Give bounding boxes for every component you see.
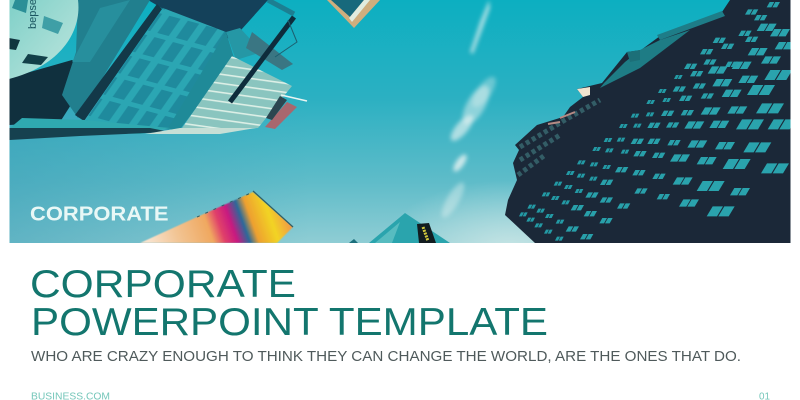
hero photo <box>10 0 790 243</box>
base strip <box>10 118 170 134</box>
antenna <box>281 95 307 101</box>
title: CORPORATE <box>30 263 296 306</box>
building: round tower <box>9 0 78 79</box>
dark top <box>148 0 268 40</box>
ornate edge <box>518 100 600 175</box>
rod <box>230 17 294 102</box>
roof <box>657 11 725 40</box>
building: left tower <box>9 0 307 140</box>
sign <box>265 102 297 129</box>
building: top centre fragment <box>327 0 380 28</box>
title <box>30 263 548 344</box>
building: right skyscraper <box>505 0 796 243</box>
windows <box>519 2 796 241</box>
tower light face <box>182 56 292 128</box>
tower left glass <box>62 0 150 118</box>
tower dark base <box>10 60 73 125</box>
tower grid face <box>84 8 226 130</box>
teal upper side <box>226 28 256 59</box>
tower right side <box>168 32 234 132</box>
billboard <box>140 191 293 243</box>
clouds <box>438 0 500 220</box>
building: bottom centre <box>349 213 450 243</box>
sky <box>10 0 730 243</box>
dark beam <box>75 4 162 121</box>
photo label: CORPORATE <box>30 204 168 226</box>
title: POWERPOINT TEMPLATE <box>31 301 548 344</box>
top-right panel <box>246 32 293 70</box>
subtitle: WHO ARE CRAZY ENOUGH TO THINK THEY CAN CHANGE THE WORLD, ARE THE ONES THAT DO. <box>31 349 741 365</box>
